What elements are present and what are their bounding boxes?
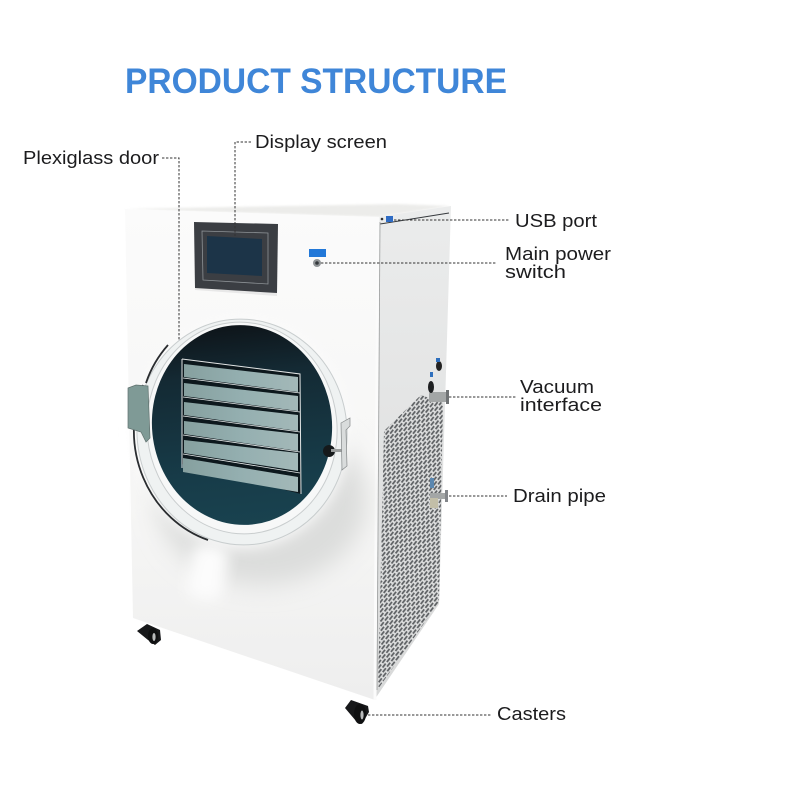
label: drain pipe: Drain pipe [513,485,606,506]
label: display screen: Display screen [255,131,387,152]
top surface [125,204,451,217]
door latch handle [323,418,350,470]
usb port [381,216,393,222]
main power switch [309,249,326,267]
panel: side of cabinet [375,206,451,699]
title: PRODUCT STRUCTURE [125,61,507,101]
drain pipe fitting [430,478,448,508]
front edge line [377,222,380,690]
label: vacuum interface: Vacuum [520,376,594,397]
label: plexiglass door: Plexiglass door [23,147,159,168]
chamber [142,316,342,534]
ventilation mesh [378,395,443,689]
panel: front of cabinet [125,209,378,700]
caster front [345,700,369,724]
label: casters: Casters [497,703,566,724]
label: main power switch: switch [505,261,566,282]
caster rear [137,624,161,645]
label: vacuum interface: interface [520,394,602,415]
front edge highlight [375,217,378,700]
door recess shading [134,316,367,602]
label: usb port: USB port [515,210,597,231]
label: main power switch: Main power [505,243,611,264]
freeze dryer machine [125,204,451,724]
display screen [194,222,278,296]
label: plexiglass door [23,147,179,340]
vacuum interface fitting [428,358,449,404]
door [126,309,358,555]
door hinge [128,385,150,442]
label: display screen [235,131,387,236]
shelves [182,359,301,494]
label: main power switch [321,243,611,282]
side top groove [380,213,449,224]
label: vacuum interface [449,376,602,415]
